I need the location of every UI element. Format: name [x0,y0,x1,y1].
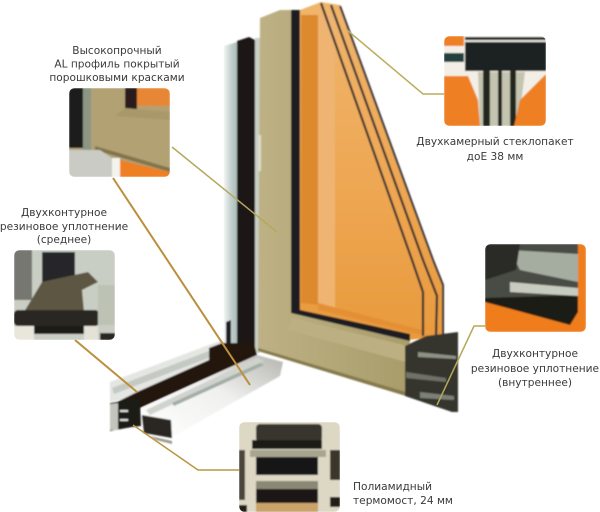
sill section left [110,398,141,431]
leader: AL profile to frame [172,147,277,232]
leader lines [75,30,485,470]
sill back rail [110,340,238,402]
leader: glazing [347,30,444,94]
glazing [300,2,443,340]
photo inset: polyamide thermal bridge [239,422,340,512]
label: AL profile: порошковыми красками [49,72,185,84]
label: thermal bridge: Полиамидный [353,481,432,493]
dark vertical profile [237,37,255,356]
label: glazing: Двухкамерный стеклопакет [416,136,574,148]
photo inset: painted profile [69,88,170,177]
photo inset: middle seal [14,250,115,340]
label: middle seal: Двухконтурное [21,207,107,219]
label: AL profile: Высокопрочный [72,45,162,57]
silver outer profile [224,42,238,350]
glass pane edges [321,3,423,336]
leader: thermal bridge [133,425,239,470]
leader: middle seal [75,340,137,392]
silver strip beside beige frame [255,38,260,353]
label: inner seal: Двухконтурное [492,348,578,360]
label: AL profile: AL профиль покрытый [54,58,180,70]
inner frame orange bead [301,15,318,305]
label: glazing: доЕ 38 мм [467,151,523,163]
window assembly [110,2,458,444]
sill section right [142,415,172,438]
right section of frame [405,332,458,412]
front sill rail [142,355,283,437]
photo inset: inner seal [485,244,586,332]
label: inner seal: (внутреннее) [498,377,572,389]
label: middle seal: (среднее) [37,234,91,246]
label: inner seal: резиновое уплотнение [471,363,599,375]
label: thermal bridge: термомост, 24 мм [353,495,453,507]
label: middle seal: резиновое уплотнение [0,221,128,233]
leader: AL profile to sill [113,178,250,385]
seal black strip [291,10,410,341]
leader: inner seal [437,326,485,405]
photo inset: glazing unit [444,36,546,126]
black sill bar [117,343,257,420]
beige window frame [258,10,410,396]
